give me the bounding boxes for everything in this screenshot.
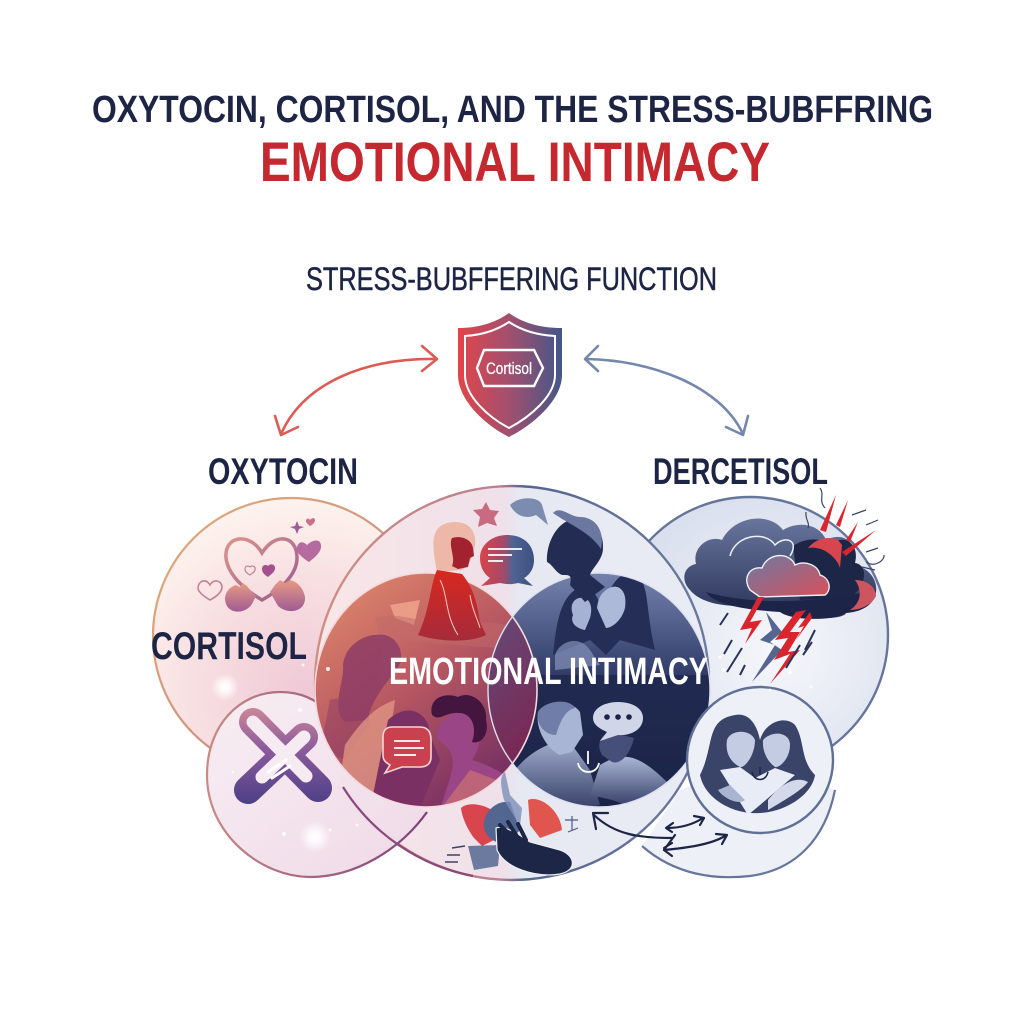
- icon: interlocked bandage hands: [248, 722, 318, 790]
- panel: right cortisol circle: [612, 497, 888, 773]
- speech bubble: lower red: [383, 727, 431, 773]
- icon: small hearts: [198, 581, 222, 600]
- burst sparks: [820, 495, 876, 556]
- figure: two embracing women: [700, 715, 815, 815]
- sparkles: [211, 655, 813, 853]
- panel: central large circle: [315, 486, 709, 880]
- icon: shield with cortisol label: Cortisol: [486, 359, 532, 378]
- small arrows: [720, 613, 815, 675]
- arrow: shield to dercetisol: [585, 346, 748, 435]
- figure: dark head above blue circle: [547, 510, 605, 602]
- heading: stress-buffering function: STRESS-BUBFFERING FUNCTION: [306, 261, 717, 297]
- panel: blue inner circle: [514, 574, 710, 806]
- panel: overlap lens: [488, 618, 536, 762]
- icon: storm cloud: [684, 488, 884, 684]
- icon: power-smile: [578, 751, 599, 772]
- arrows: double-headed links: [593, 813, 727, 856]
- figure: mother and child: [553, 573, 655, 670]
- figure: lower right person: [436, 713, 502, 805]
- figure: man in red shirt: [418, 522, 486, 641]
- label: dercetisol: DERCETISOL: [653, 451, 828, 492]
- arrow: shield to oxytocin: [275, 346, 437, 435]
- panel: left oxytocin circle: [153, 498, 429, 774]
- label: cortisol: CORTISOL: [151, 625, 307, 668]
- panel: small lower-right bubble: [687, 687, 833, 833]
- lightning bolts: [740, 597, 764, 644]
- speech bubble with dots: [593, 702, 643, 741]
- icon: heart with hands: [198, 518, 321, 612]
- icon: pink star: [473, 502, 499, 527]
- label: oxytocin: OXYTOCIN: [208, 451, 358, 492]
- figure: dark blob person: [320, 635, 401, 760]
- icon: hands in bottom centre: [445, 772, 578, 875]
- panel: lower-left bubble with cross icon background: [207, 692, 427, 877]
- decorative outlines of lower arcs: [207, 692, 427, 877]
- speech bubble: red-blue: [480, 535, 534, 586]
- panel: red inner circle: [316, 574, 512, 806]
- panel: lower-right outer arc: [642, 760, 835, 877]
- title: EMOTIONAL INTIMACY: [260, 130, 770, 193]
- icon: shield with cortisol label: [458, 313, 562, 437]
- figure: man and partner: [517, 702, 667, 806]
- figure: lower left body: [342, 700, 395, 792]
- icon: blue cap shape: [510, 498, 548, 525]
- label: emotional intimacy: EMOTIONAL INTIMACY: [389, 651, 708, 693]
- title: [92, 89, 933, 193]
